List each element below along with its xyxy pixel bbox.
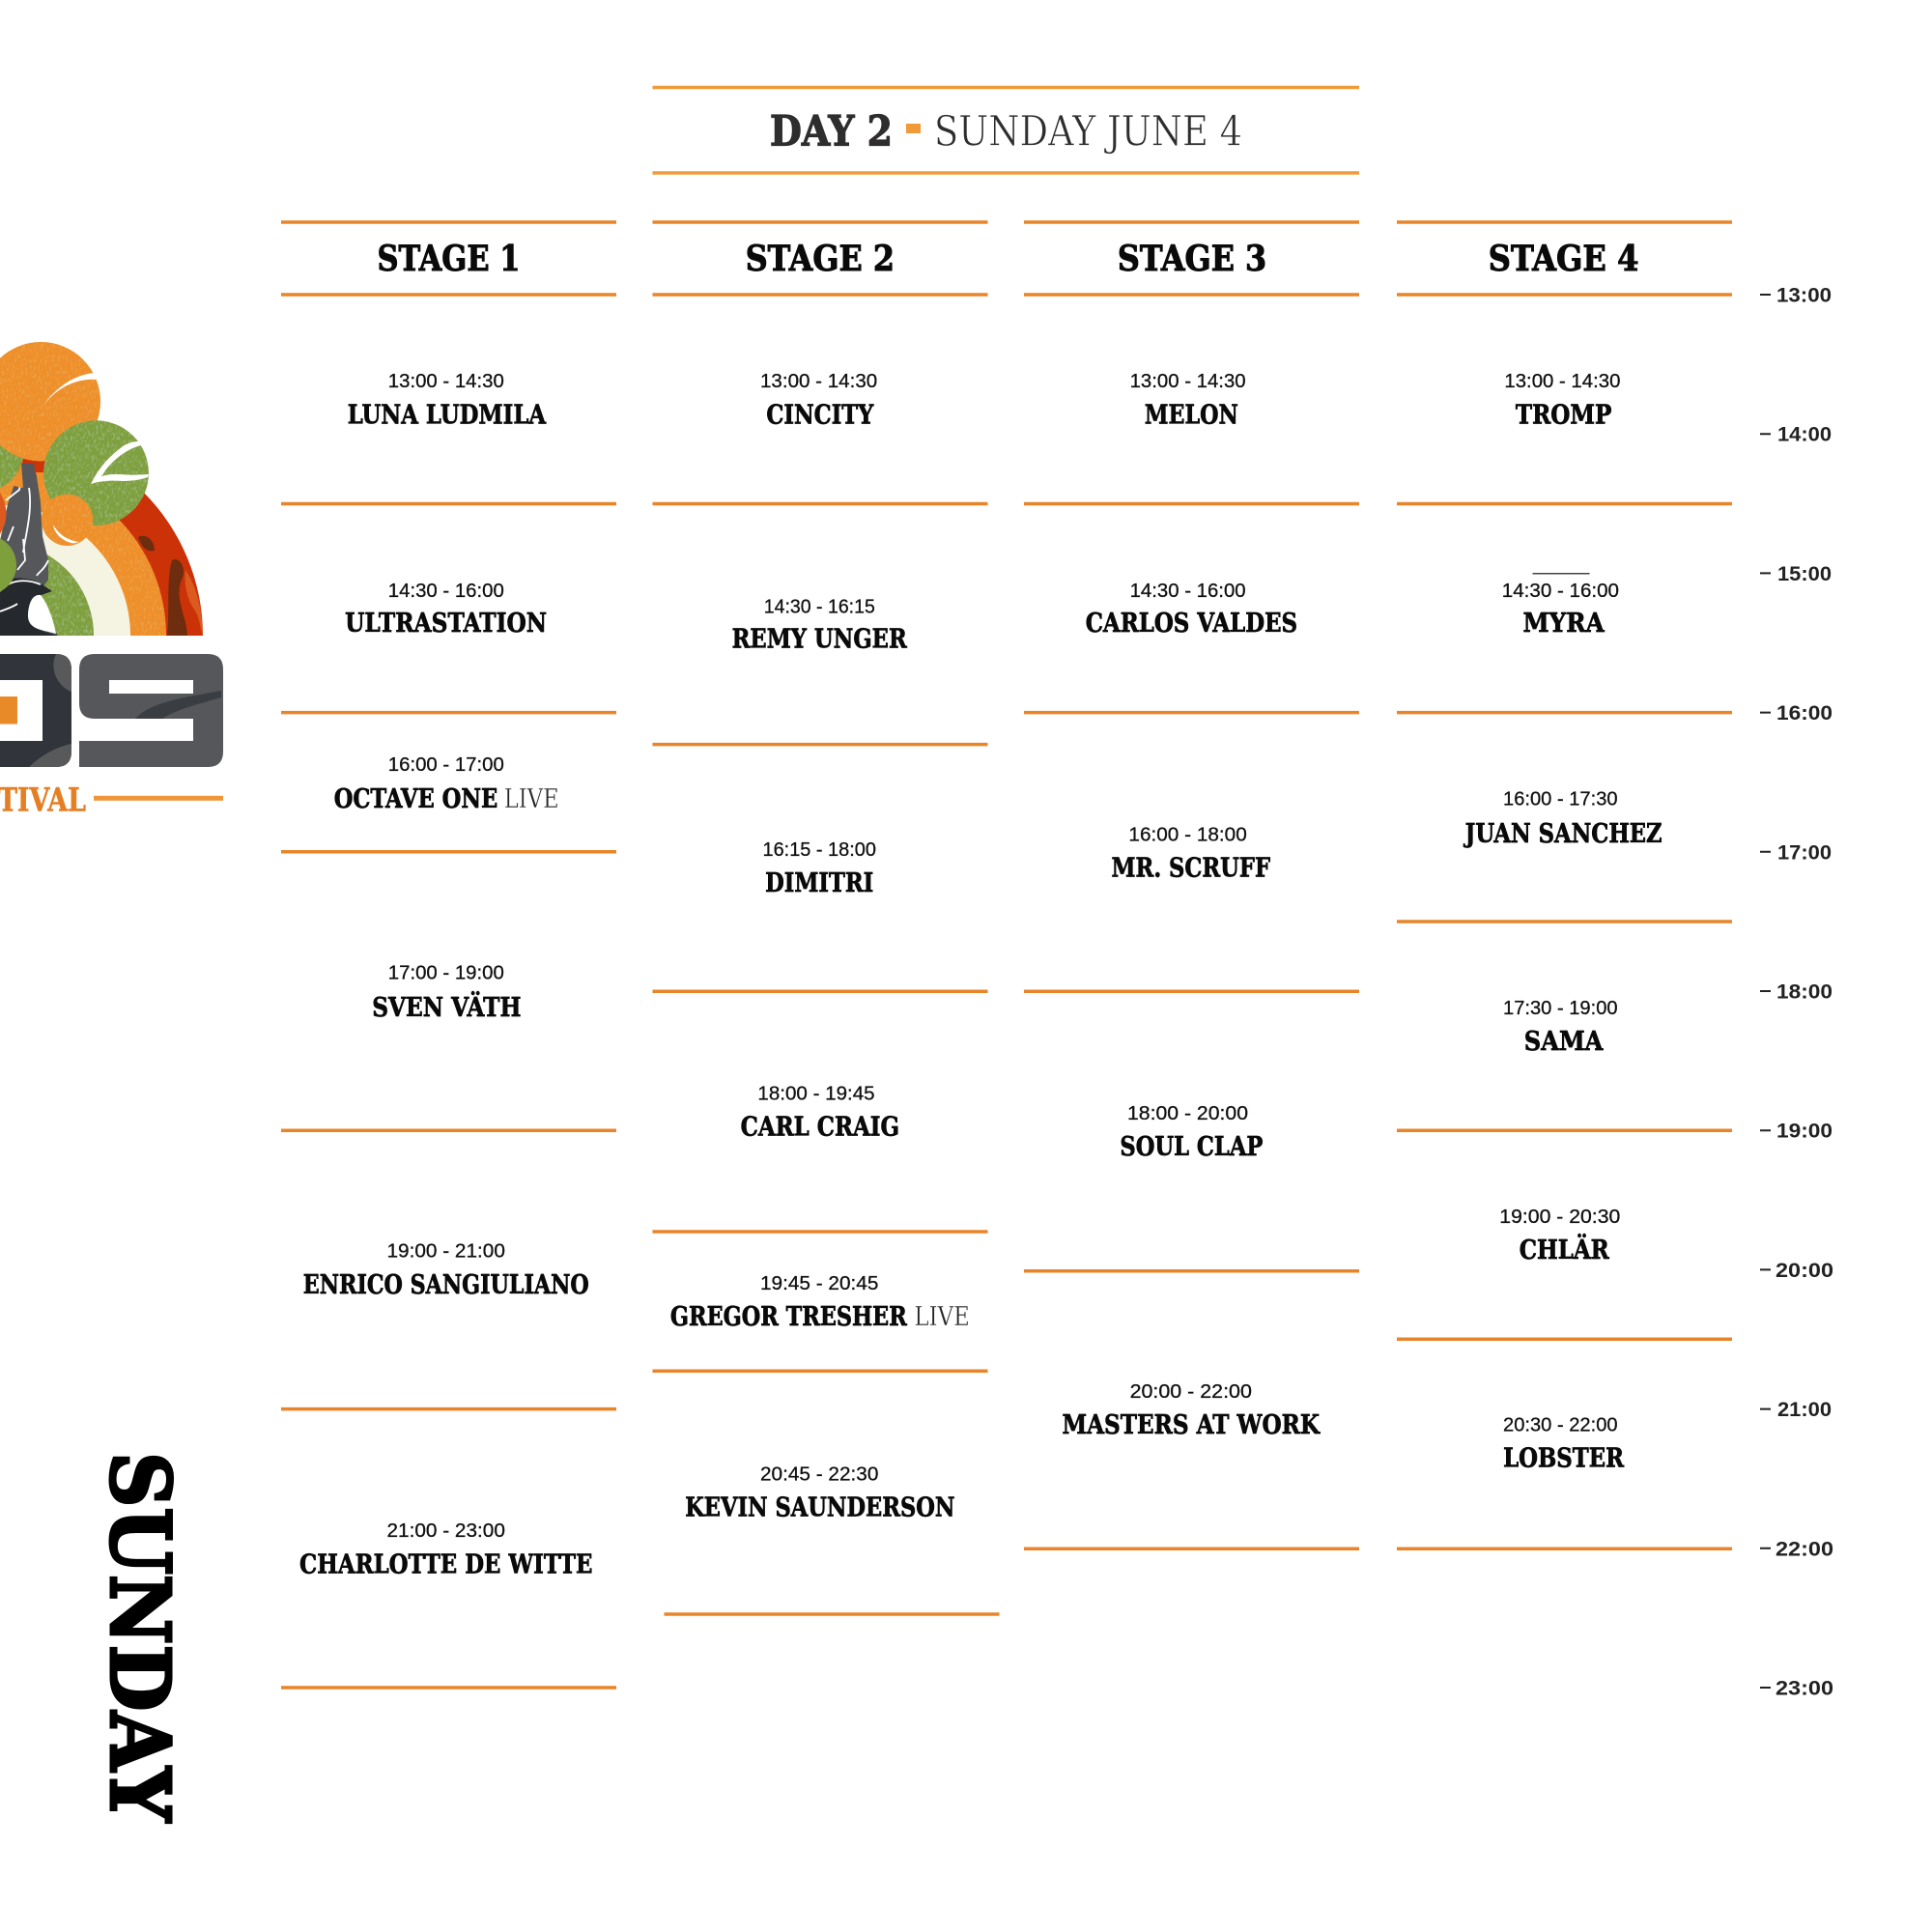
time axis: 22:00 bbox=[1776, 1538, 1833, 1560]
slot: Carl Craig bbox=[741, 1083, 899, 1142]
slot: Chlär bbox=[1499, 1207, 1620, 1265]
logo: digit 9 bbox=[79, 654, 223, 767]
slot: Sama: SAMA bbox=[1524, 1027, 1604, 1057]
logo: small orange leaf bbox=[42, 495, 93, 546]
slot: Ultrastation: ULTRASTATION bbox=[345, 609, 547, 639]
time axis: 15:00 bbox=[1777, 563, 1832, 585]
logo: left leaves bbox=[0, 406, 45, 595]
slot: Myra bbox=[1502, 573, 1619, 639]
time axis: 21:00 bbox=[1777, 1399, 1832, 1421]
title banner bbox=[653, 87, 1359, 173]
slot: Masters at Work: 20:00 - 22:00 bbox=[1130, 1381, 1252, 1403]
time axis: 20:00 bbox=[1776, 1260, 1833, 1282]
slot: Dimitri: DIMITRI bbox=[765, 868, 873, 898]
stage 4 heading: STAGE 4 bbox=[1489, 239, 1638, 279]
slot: Sama: 17:30 - 19:00 bbox=[1503, 998, 1618, 1019]
slot: Cincity: CINCITY bbox=[766, 400, 874, 430]
slot: Carlos Valdes: CARLOS VALDES bbox=[1086, 609, 1297, 639]
slot: Gregor Tresher bbox=[670, 1273, 970, 1332]
slot: Charlotte de Witte: 21:00 - 23:00 bbox=[386, 1520, 505, 1542]
title: separator bbox=[906, 124, 921, 133]
slot: Ultrastation: 14:30 - 16:00 bbox=[388, 581, 504, 602]
time axis: 19:00 bbox=[1776, 1121, 1833, 1143]
slot: Juan Sanchez bbox=[1463, 788, 1662, 849]
slot: Lobster bbox=[1503, 1414, 1625, 1474]
slot: Juan Sanchez: 16:00 - 17:30 bbox=[1503, 788, 1618, 810]
slot: Carlos Valdes: 14:30 - 16:00 bbox=[1130, 581, 1246, 602]
slot: Mr. Scruff: 16:00 - 18:00 bbox=[1128, 825, 1247, 846]
slot: Sven Väth: 17:00 - 19:00 bbox=[388, 962, 504, 983]
logo: rainbow arches bbox=[0, 458, 203, 636]
logo: tree trunk bbox=[0, 464, 58, 636]
slot: Remy Unger bbox=[732, 597, 907, 654]
title: day number: DAY 2 bbox=[770, 108, 893, 156]
slot: Soul Clap: SOUL CLAP bbox=[1120, 1132, 1263, 1162]
time axis: 18:00 bbox=[1776, 981, 1833, 1003]
slot: Lobster: 20:30 - 22:00 bbox=[1503, 1414, 1618, 1435]
slot: Sven Väth: SVEN VÄTH bbox=[372, 990, 522, 1023]
slot: Mr. Scruff: MR. SCRUFF bbox=[1111, 854, 1270, 884]
slot: Myra: 14:30 - 16:00 bbox=[1502, 581, 1619, 602]
slot: Myra: MYRA bbox=[1522, 609, 1605, 639]
column: stage 3 bbox=[1024, 222, 1359, 1548]
slot: Melon: MELON bbox=[1145, 400, 1238, 430]
slot: Luna Ludmila: 13:00 - 14:30 bbox=[388, 371, 504, 392]
slot: Dimitri: 16:15 - 18:00 bbox=[763, 839, 876, 861]
time axis: 23:00 bbox=[1776, 1677, 1833, 1700]
slot: Cincity: 13:00 - 14:30 bbox=[760, 371, 877, 392]
stage 2 heading: STAGE 2 bbox=[746, 239, 895, 279]
logo bbox=[0, 342, 223, 838]
column: stage 2 bbox=[653, 222, 999, 1614]
slot: Kevin Saunderson: 20:45 - 22:30 bbox=[760, 1464, 878, 1486]
slot: Enrico Sangiuliano bbox=[303, 1241, 589, 1300]
slot: Chlär: 19:00 - 20:30 bbox=[1499, 1207, 1620, 1228]
slot: Octave One: OCTAVE ONE bbox=[334, 784, 497, 814]
slot: Enrico Sangiuliano: 19:00 - 21:00 bbox=[386, 1241, 505, 1263]
slot: Kevin Saunderson: KEVIN SAUNDERSON bbox=[685, 1493, 954, 1523]
column: stage 1 bbox=[281, 222, 616, 1688]
logo: wordmark rule bbox=[94, 796, 223, 801]
slot: Mr. Scruff bbox=[1111, 825, 1270, 884]
slot: Charlotte de Witte bbox=[299, 1520, 593, 1579]
stage 3 heading: STAGE 3 bbox=[1118, 239, 1266, 279]
slot: Luna Ludmila: LUNA LUDMILA bbox=[348, 400, 547, 430]
slot: Charlotte de Witte: CHARLOTTE DE WITTE bbox=[299, 1549, 593, 1579]
slot: Soul Clap: 18:00 - 20:00 bbox=[1127, 1103, 1248, 1124]
slot: Remy Unger: 14:30 - 16:15 bbox=[764, 597, 875, 618]
slot: Tromp: TROMP bbox=[1516, 400, 1611, 430]
slot: Dimitri bbox=[763, 839, 876, 898]
time axis: 14:00 bbox=[1777, 424, 1832, 446]
time axis: 16:00 bbox=[1776, 702, 1833, 724]
slot: Gregor Tresher: GREGOR TRESHER bbox=[670, 1302, 907, 1332]
slot: Carl Craig: CARL CRAIG bbox=[741, 1113, 899, 1142]
slot: Melon: 13:00 - 14:30 bbox=[1130, 371, 1246, 392]
slot: Sama bbox=[1503, 998, 1618, 1057]
slot: Chlär: CHLÄR bbox=[1520, 1233, 1609, 1265]
slot: Gregor Tresher: 19:45 - 20:45 bbox=[760, 1273, 878, 1294]
time axis: 13:00 bbox=[1776, 284, 1832, 307]
slot: Carlos Valdes bbox=[1086, 581, 1297, 639]
slot: Juan Sanchez: JUAN SANCHEZ bbox=[1463, 819, 1662, 849]
slot: Carl Craig: 18:00 - 19:45 bbox=[757, 1083, 875, 1104]
logo: big orange leaf bbox=[0, 342, 100, 461]
slot: Melon bbox=[1130, 371, 1246, 430]
time axis: 17:00 bbox=[1777, 841, 1832, 864]
slot: Cincity bbox=[760, 371, 877, 430]
slot: Masters at Work bbox=[1063, 1381, 1321, 1440]
slot: Lobster: LOBSTER bbox=[1503, 1444, 1625, 1474]
logo: green leaf bbox=[43, 420, 149, 526]
slot: Sven Väth bbox=[372, 962, 522, 1023]
slot: Octave One: 16:00 - 17:00 bbox=[388, 754, 504, 776]
slot: Remy Unger: REMY UNGER bbox=[732, 624, 907, 654]
stage 1 heading: STAGE 1 bbox=[377, 239, 520, 279]
time axis bbox=[1760, 284, 1833, 1700]
slot: Luna Ludmila bbox=[348, 371, 547, 430]
slot: Enrico Sangiuliano: ENRICO SANGIULIANO bbox=[303, 1270, 589, 1300]
slot: Tromp bbox=[1504, 371, 1620, 430]
column: stage 4 bbox=[1397, 222, 1732, 1548]
slot: Ultrastation bbox=[345, 581, 547, 639]
slot: Gregor Tresher: LIVE bbox=[914, 1302, 970, 1332]
slot: Masters at Work: MASTERS AT WORK bbox=[1063, 1410, 1321, 1440]
slot: Soul Clap bbox=[1120, 1103, 1263, 1162]
logo: digit 0 bbox=[0, 654, 71, 767]
slot: Kevin Saunderson bbox=[685, 1464, 954, 1523]
slot: Tromp: 13:00 - 14:30 bbox=[1504, 371, 1620, 392]
slot: Octave One: LIVE bbox=[504, 784, 559, 814]
title: date: SUNDAY JUNE 4 bbox=[934, 108, 1242, 156]
vertical day label: SUNDAY bbox=[91, 1452, 187, 1823]
slot: Octave One bbox=[334, 754, 559, 814]
